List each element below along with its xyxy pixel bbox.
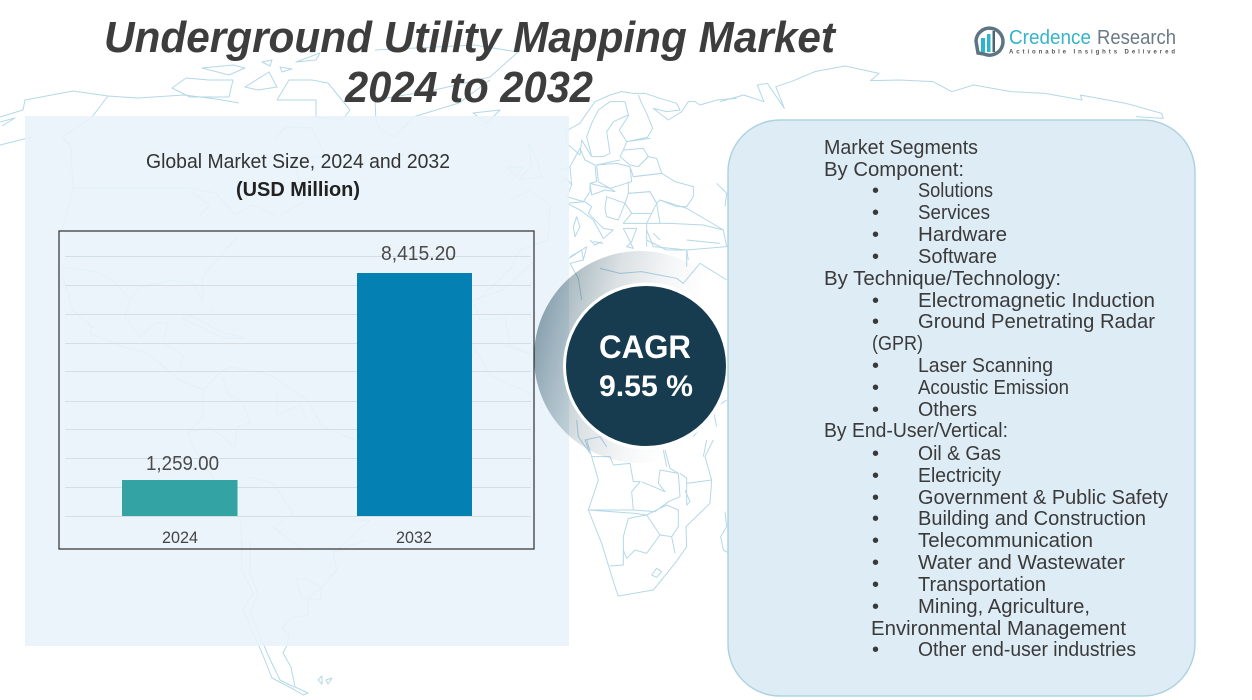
- axis label 2032: 2032: [396, 529, 432, 547]
- segment list: •: [872, 465, 879, 487]
- bar chart: [59, 231, 534, 549]
- segment list: •: [872, 180, 879, 202]
- segment list: Mining, Agriculture,: [918, 596, 1090, 618]
- segment list: Acoustic Emission: [918, 377, 1069, 399]
- value label 2024: 1,259.00: [146, 453, 219, 475]
- segment list: •: [872, 552, 879, 574]
- segment list: Telecommunication: [918, 530, 1093, 552]
- icon: logo speech bubble with bars: [976, 28, 1003, 55]
- title: [104, 13, 837, 112]
- segment list: Other end-user industries: [918, 639, 1136, 661]
- segment list: Software: [918, 246, 997, 268]
- segment list: Market Segments: [824, 137, 978, 159]
- bar 2032: [357, 273, 472, 516]
- segment list: •: [872, 487, 879, 509]
- CAGR value: 9.55 %: [599, 370, 693, 403]
- segment list: •: [872, 224, 879, 246]
- segment list: •: [872, 443, 879, 465]
- segment list: •: [872, 574, 879, 596]
- segment list: Hardware: [918, 224, 1007, 246]
- logo tagline: Actionable Insights Delivered: [1009, 50, 1175, 56]
- panel: market size chart: [25, 116, 569, 646]
- segment list: •: [872, 530, 879, 552]
- segment list: •: [872, 355, 879, 377]
- segment list: •: [872, 246, 879, 268]
- segment list: Solutions: [918, 180, 993, 202]
- bar 2024: [122, 480, 238, 516]
- segment list: By Technique/Technology:: [824, 268, 1061, 290]
- segment list: Services: [918, 202, 990, 224]
- segment list: •: [872, 508, 879, 530]
- segment list: •: [872, 639, 879, 661]
- segment list: •: [872, 377, 879, 399]
- CAGR badge: [534, 251, 746, 463]
- chart unit: (USD Million): [236, 179, 360, 201]
- segment list: Environmental Management: [871, 618, 1126, 640]
- segment list: By Component:: [824, 159, 964, 181]
- segment list: •: [872, 290, 879, 312]
- logo: Credence Research: Research: [1097, 26, 1176, 49]
- segment list: •: [872, 596, 879, 618]
- segment list: •: [872, 311, 879, 333]
- title: Underground Utility Mapping Market: [104, 13, 837, 62]
- panel: market segments: [728, 120, 1195, 696]
- CAGR label: CAGR: [599, 329, 691, 365]
- segment list: •: [872, 399, 879, 421]
- segment list: (GPR): [872, 333, 923, 355]
- segment list: Others: [918, 399, 977, 421]
- segment list: •: [872, 202, 879, 224]
- segment list: Water and Wastewater: [918, 552, 1125, 574]
- segment list: [824, 137, 1168, 661]
- segment list: Electromagnetic Induction: [918, 290, 1155, 312]
- segment list: Transportation: [918, 574, 1046, 596]
- segment list: Laser Scanning: [918, 355, 1053, 377]
- segment list: By End-User/Vertical:: [824, 420, 1008, 442]
- logo: Credence Research: [976, 26, 1176, 56]
- logo wordmark: Credence: [1009, 26, 1091, 49]
- segment list: Ground Penetrating Radar: [918, 311, 1155, 333]
- segment list: Government & Public Safety: [918, 487, 1168, 509]
- segment list: Electricity: [918, 465, 1001, 487]
- segment list: Oil & Gas: [918, 443, 1001, 465]
- title: 2024 to 2032: [344, 63, 593, 112]
- segment list: Building and Construction: [918, 508, 1146, 530]
- value label 2032: 8,415.20: [381, 243, 456, 265]
- chart heading: Global Market Size, 2024 and 2032: [146, 151, 450, 173]
- axis label 2024: 2024: [162, 529, 198, 547]
